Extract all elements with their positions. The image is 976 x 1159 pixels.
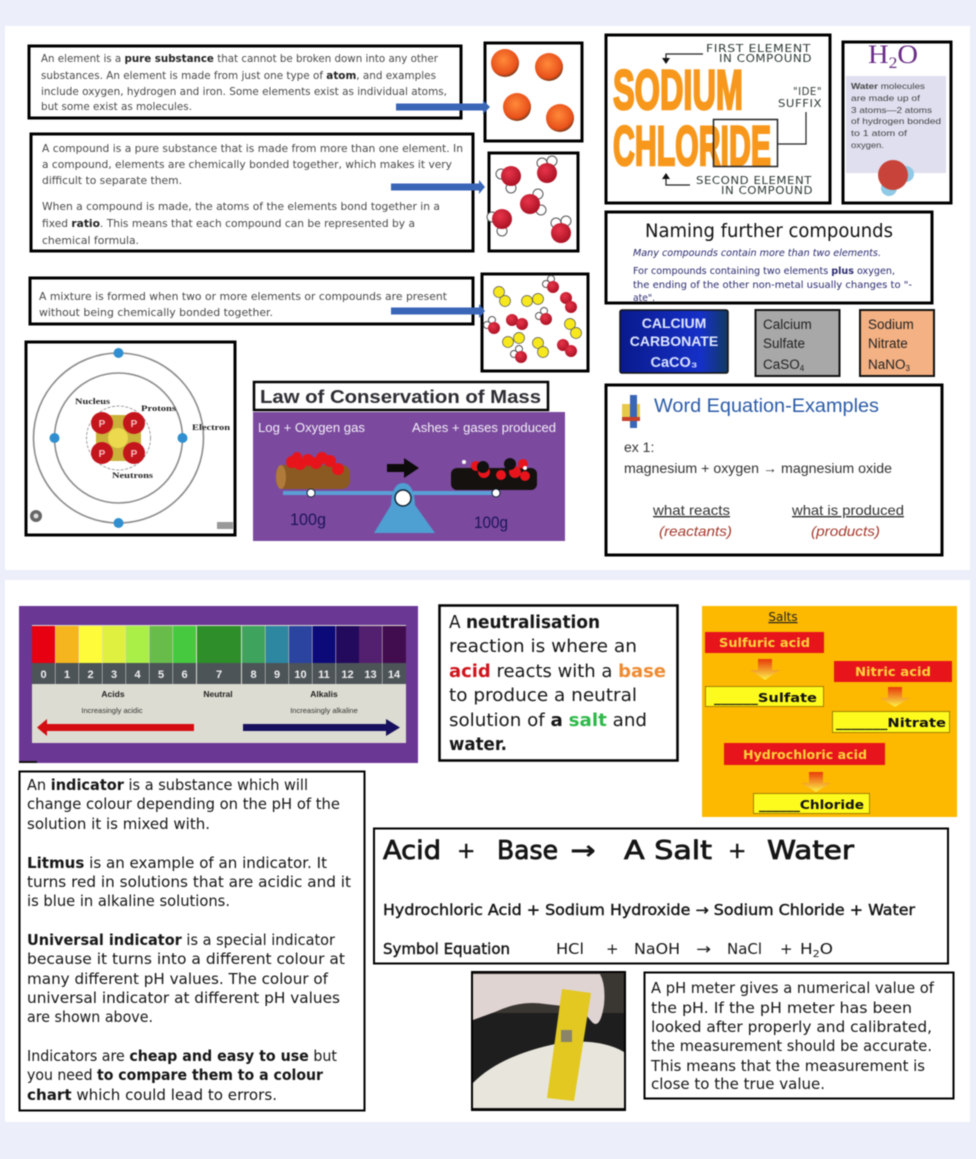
text box: indicators: solution it is mixed with. (27, 815, 210, 833)
panel: acid base equations: + (728, 839, 746, 864)
arrow: nitric to nitrate (880, 687, 910, 707)
text box: pH meter: A pH meter gives a numerical value of (651, 979, 935, 997)
panel: acid base equations: 2 (813, 949, 820, 960)
heading: law of conservation of mass: Law of Conservation of Mass (260, 387, 541, 407)
diagram: sodium chloride naming: IN COMPOUND (721, 185, 813, 197)
panel: acid base equations: Acid (383, 836, 441, 866)
panel: H2O water molecule: of hydrogen bonded (851, 116, 941, 126)
chart: pH scale: 2 (87, 669, 94, 681)
text box: indicators: many different pH values. The colour of (27, 970, 329, 988)
panel: H2O water molecule: oxygen. (851, 140, 884, 150)
panel: acid base equations: + (457, 839, 475, 864)
arrow: hydrochloric to chloride (801, 772, 831, 792)
diagram: sodium chloride naming (606, 35, 830, 203)
chart: pH scale: 14 (388, 669, 401, 681)
panel: acid base equations: → (696, 940, 711, 958)
diagram: atom structure: P (99, 449, 106, 460)
diagram: atom structure: Neutrons (112, 471, 153, 480)
panel: word equation examples: Word Equation-Examples (654, 396, 879, 417)
panel: word equation examples: magnesium + oxygen → magnesium oxide (624, 460, 892, 476)
chart: pH scale: 12 (341, 669, 354, 681)
panel: word equation examples: what is produced (791, 502, 904, 518)
card: sodium nitrate: NaNO (868, 357, 906, 372)
chart: pH scale: Alkalis (310, 689, 338, 699)
label: chloride (754, 794, 870, 814)
panel: naming further compounds (606, 212, 932, 304)
text box: indicators: you need to compare them to a colour (27, 1066, 324, 1084)
arrow: element to atoms (396, 100, 490, 114)
text box: pH meter (644, 972, 954, 1098)
panel: acid base equations: A Salt (624, 836, 712, 866)
label: hydrochloric acid: Hydrochloric acid (743, 748, 867, 762)
card: calcium sulfate: 4 (800, 364, 805, 373)
text box: compound definition: chemical formula. (42, 235, 139, 247)
panel: acid base equations: Symbol Equation (383, 940, 510, 958)
text box: pH meter: the pH. If the pH meter has been (651, 999, 912, 1017)
panel: acid base equations: HCl (556, 940, 584, 958)
arrow: mixture to particles (391, 304, 485, 318)
text box: neutralisation: A neutralisation (449, 612, 600, 633)
text box: element definition (29, 46, 461, 118)
arrow: increasingly alkaline (243, 719, 400, 736)
panel: H2O water molecule: O (897, 40, 918, 69)
text box: indicators: An indicator is a substance which will (27, 776, 308, 794)
diagram: sodium chloride naming: FIRST ELEMENT (706, 43, 811, 55)
card: calcium carbonate: CARBONATE (630, 333, 718, 349)
diagram: conservation of mass balance (253, 412, 565, 541)
text box: compound definition: When a compound is made, the atoms of the elements bond together in a (42, 201, 440, 213)
diagram: conservation of mass balance: 100g (290, 510, 326, 529)
text box: compound definition: fixed ratio. This means that each compound can be represented by a (42, 218, 415, 230)
panel: acid base equations: NaCl (727, 940, 762, 958)
diagram: atom structure: Protons (141, 404, 176, 413)
diagram: sodium chloride naming: IN COMPOUND (719, 53, 812, 65)
card: sodium nitrate: Nitrate (868, 336, 908, 351)
chart: pH scale: 8 (250, 669, 257, 681)
panel: word equation examples: what reacts (652, 502, 730, 518)
text box: indicators: chart which could lead to errors. (27, 1086, 277, 1104)
panel: acid base equations: → (570, 836, 596, 866)
chart: pH scale: 7 (216, 669, 222, 681)
text box: indicators: Universal indicator is a special indicator (27, 931, 336, 949)
label: sulfate: ______ Sulfate (714, 691, 817, 706)
text box: compound definition: a compound, elements are chemically bonded together, which makes it very (42, 159, 452, 171)
card: sodium nitrate (860, 310, 934, 376)
chart: pH scale: 11 (318, 669, 330, 681)
chart: pH scale: 1 (64, 669, 70, 681)
chart: pH scale: 10 (294, 669, 307, 681)
text box: indicators: turns red in solutions that are acidic and it (27, 873, 351, 891)
panel: acid base equations: Base (497, 836, 558, 866)
chart: pH scale: Neutral (203, 689, 233, 699)
text box: compound definition (31, 134, 473, 251)
panel: naming further compounds: Many compounds contain more than two elements. (633, 248, 881, 259)
panel: naming further compounds: ate". (633, 293, 655, 304)
text box: element definition: but some exist as molecules. (41, 101, 192, 113)
label: sulfuric acid (705, 632, 824, 653)
image: water molecules compound (487, 153, 578, 251)
label: chloride: ______ Chloride (759, 798, 864, 813)
arrow: sulfuric to sulfate (750, 659, 780, 680)
panel: acid base equations: Hydrochloric Acid + Sodium Hydroxide → Sodium Chloride + Water (383, 901, 916, 919)
text box: mixture definition: A mixture is formed when two or more elements or compounds are present (39, 291, 447, 303)
panel: acid base equations: H (800, 940, 811, 958)
diagram: conservation of mass balance: Log + Oxygen gas (258, 420, 365, 435)
chart: pH scale: Increasingly acidic (81, 706, 143, 715)
text box: indicators (20, 772, 364, 1110)
text box: indicators: because it turns into a different colour at (27, 950, 345, 968)
panel: acid base equations: + (780, 940, 793, 958)
card: calcium sulfate: Calcium (763, 317, 812, 332)
text box: neutralisation: to produce a neutral (449, 685, 637, 706)
panel: salts: Salts (768, 610, 798, 624)
panel: H2O water molecule: Water molecules (851, 81, 925, 91)
chart: pH scale: 9 (274, 669, 280, 681)
text box: neutralisation (440, 606, 678, 760)
text box: element definition: An element is a pure substance that cannot be broken down into any other (41, 53, 439, 65)
diagram: sodium chloride naming: SUFFIX (778, 98, 822, 110)
diagram: atom structure: Nucleus (75, 397, 110, 406)
arrow: compound to molecules (391, 180, 485, 194)
text box: indicators: Indicators are cheap and easy to use but (27, 1047, 337, 1065)
text box: compound definition: A compound is a pure substance that is made from more than one element. In (42, 143, 463, 155)
panel: word equation examples: (reactants) (659, 523, 732, 539)
text box: indicators: are shown above. (27, 1008, 153, 1026)
diagram: conservation of mass balance: Ashes + gases produced (412, 420, 556, 435)
diagram: atom structure: P (131, 449, 138, 460)
panel: elements compounds mixtures (5, 26, 970, 570)
chart: pH scale: Acids (101, 689, 125, 699)
label: nitric acid: Nitric acid (855, 665, 931, 679)
panel: word equation examples (606, 385, 942, 555)
arrow: increasingly acidic (37, 719, 194, 736)
panel: acid base equations: NaOH (634, 940, 680, 958)
panel: acids bases and salts (5, 580, 970, 1122)
diagram: conservation of mass balance: 100g (474, 513, 508, 532)
diagram: atom structure: Electron (192, 423, 231, 432)
card: sodium nitrate: 3 (906, 364, 911, 373)
text box: pH meter: looked after properly and calibrated, (651, 1018, 932, 1036)
text box: neutralisation: solution of a salt and (449, 710, 647, 731)
text box: element definition: include oxygen, hydrogen and iron. Some elements exist as individual atoms, (41, 86, 447, 98)
chart: pH scale: 4 (134, 669, 141, 681)
image: element atoms (485, 43, 582, 141)
card: calcium sulfate: Sulfate (763, 336, 805, 351)
chart: pH scale: 3 (111, 669, 117, 681)
panel: acid base equations: O (820, 940, 833, 958)
diagram: sodium chloride naming: "IDE" (793, 86, 822, 98)
card: calcium sulfate (756, 310, 840, 376)
panel: H2O water molecule: 3 atoms—2 atoms (851, 105, 932, 115)
card: calcium carbonate: CaCO₃ (650, 355, 698, 371)
text box: indicators: Litmus is an example of an indicator. It (27, 854, 327, 872)
chart: pH scale: 13 (364, 669, 377, 681)
text box: pH meter: close to the true value. (651, 1075, 825, 1093)
label: nitrate: _______ Nitrate (836, 716, 946, 731)
image: mixture particles (482, 274, 588, 371)
panel: acid base equations (374, 828, 948, 964)
diagram: atom structure: P (99, 419, 106, 430)
panel: H2O water molecule: are made up of (851, 93, 921, 103)
text box: indicators: change colour depending on the pH of the (27, 795, 340, 813)
diagram: atom structure (26, 342, 235, 535)
label: nitric acid (834, 661, 952, 682)
diagram: sodium chloride naming: SODIUM (613, 58, 743, 121)
text box: indicators: universal indicator at different pH values (27, 989, 340, 1007)
panel: acid base equations: + (606, 940, 619, 958)
text box: neutralisation: reaction is where an (449, 636, 637, 657)
panel: H2O water molecule: H (868, 40, 887, 69)
text box: pH meter: the measurement should be accurate. (651, 1037, 932, 1055)
text box: pH meter: This means that the measurement is (650, 1057, 925, 1075)
photo: pH meter in solution (472, 972, 625, 1110)
text box: indicators: is blue in alkaline solutions. (27, 892, 230, 910)
chart: pH scale: Increasingly alkaline (290, 706, 358, 715)
panel: H2O water molecule (843, 40, 951, 203)
text box: mixture definition: without being chemically bonded together. (39, 307, 273, 319)
label: nitrate (832, 712, 950, 732)
chart: pH scale (19, 606, 418, 763)
panel: H2O water molecule: 2 (889, 55, 897, 72)
panel: naming further compounds: the ending of the other non-metal usually changes to "- (633, 280, 912, 291)
label: sulfuric acid: Sulfuric acid (719, 636, 810, 650)
text box: neutralisation: water. (449, 734, 507, 755)
chart: pH scale: 0 (40, 669, 47, 681)
card: calcium carbonate (620, 310, 728, 373)
card: calcium sulfate: CaSO (763, 357, 800, 372)
panel: word equation examples: (products) (811, 523, 880, 539)
card: sodium nitrate: Sodium (868, 317, 914, 332)
panel: naming further compounds: For compounds containing two elements plus oxygen, (633, 266, 895, 277)
diagram: sodium chloride naming: CHLORIDE (613, 114, 771, 177)
card: calcium carbonate: CALCIUM (642, 315, 706, 331)
heading: law of conservation of mass (254, 382, 548, 410)
panel: acid base equations: Water (767, 836, 854, 866)
chart: pH scale: 5 (158, 669, 164, 681)
panel: naming further compounds: Naming further compounds (645, 220, 893, 242)
panel: salts (702, 606, 957, 817)
text box: compound definition: difficult to separate them. (42, 175, 182, 187)
diagram: atom structure: P (131, 419, 138, 430)
text box: mixture definition (30, 278, 473, 324)
diagram: sodium chloride naming: SECOND ELEMENT (696, 175, 812, 187)
text box: element definition: substances. An element is made from just one type of atom, and examples (41, 70, 436, 82)
label: sulfate (706, 686, 824, 706)
icon: book (622, 395, 640, 428)
panel: H2O water molecule: to 1 atom of (851, 128, 908, 138)
text box: neutralisation: acid reacts with a base (449, 661, 666, 682)
chart: pH scale: 6 (181, 669, 188, 681)
panel: word equation examples: ex 1: (624, 439, 654, 455)
label: hydrochloric acid (724, 743, 885, 765)
